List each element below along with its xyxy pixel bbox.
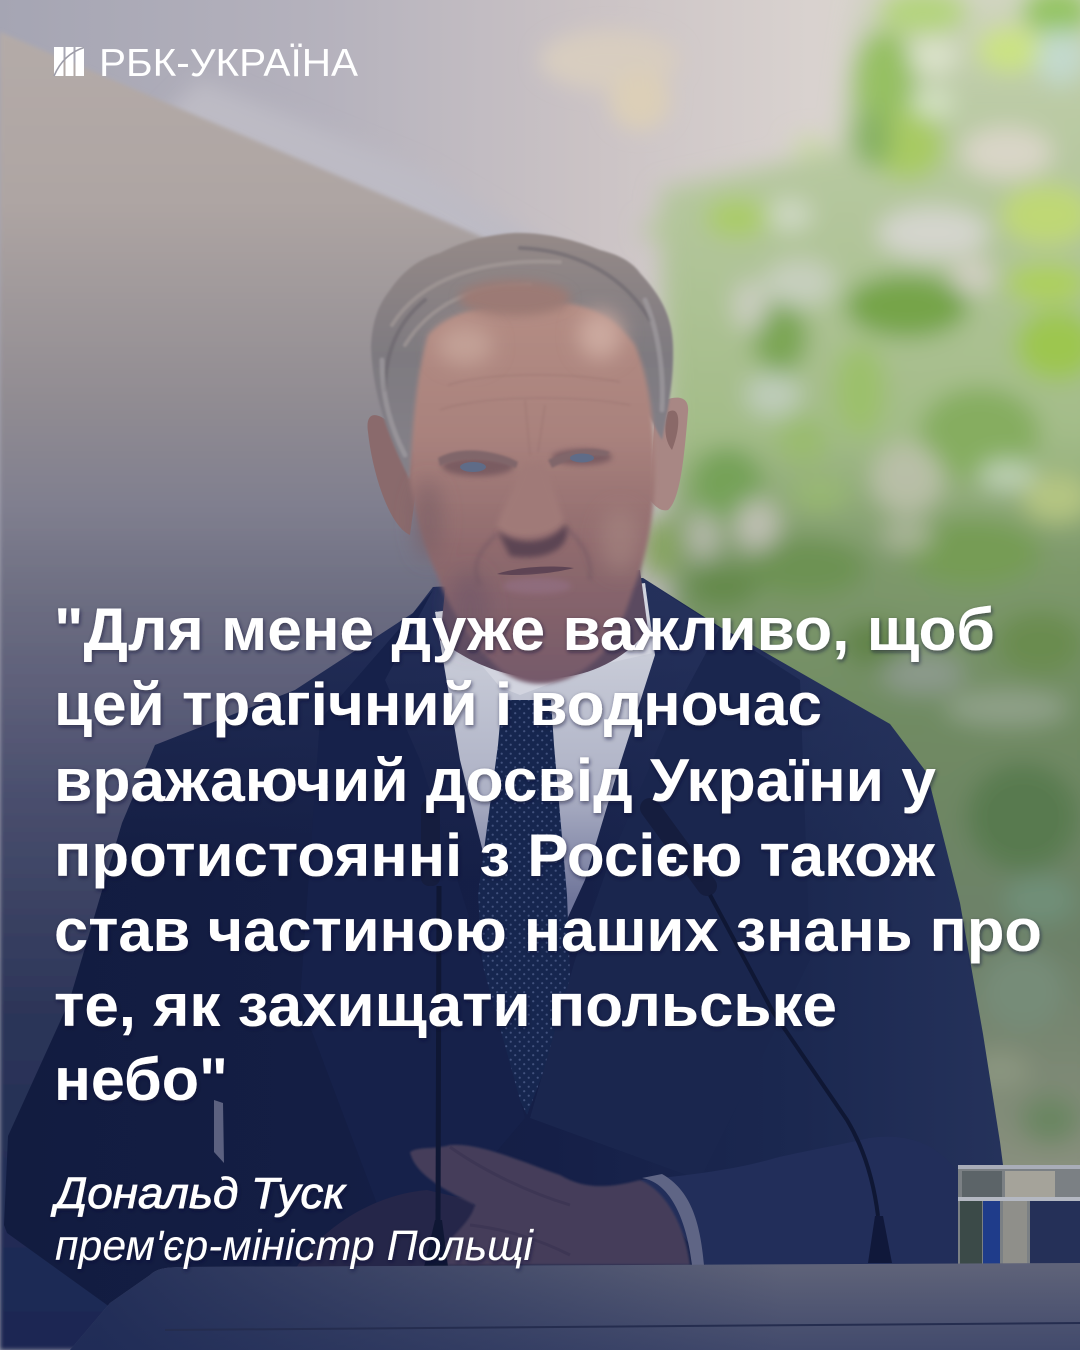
left eye — [460, 462, 486, 472]
right eye — [570, 454, 594, 462]
shirt cuff — [642, 1174, 704, 1265]
right ear — [650, 398, 688, 510]
mouth — [497, 566, 574, 575]
blue stripe — [983, 1201, 1000, 1264]
under-nose shadow — [497, 524, 567, 557]
logo wordmark: РБК-УКРАЇНА — [99, 42, 358, 85]
quote text — [54, 596, 1042, 1113]
quote text: вражаючий досвід України у — [54, 747, 937, 814]
shirt collar — [435, 583, 653, 695]
attribution — [50, 1169, 534, 1270]
quote text: цей трагічний і водночас — [54, 671, 822, 738]
table groove — [165, 1323, 1080, 1330]
portrait of Donald Tusk — [4, 233, 1003, 1350]
quote text: став частиною наших знань про — [54, 897, 1042, 964]
left lapel — [300, 590, 525, 1265]
table left shade — [70, 1263, 1080, 1350]
speaker name: Дональд Туск — [50, 1169, 347, 1218]
wall on the left — [0, 32, 640, 1350]
speaker role: прем'єр-міністр Польщі — [55, 1222, 534, 1270]
neck shadow — [440, 570, 648, 678]
quote text: протистоянні з Росією також — [54, 822, 936, 889]
left ear — [368, 415, 420, 535]
quote text: "Для мене дуже важливо, щоб — [54, 596, 995, 663]
finger shading — [450, 1147, 570, 1255]
nose — [497, 462, 564, 536]
shaded area right of the portrait — [470, 240, 870, 1350]
sleeve white streak — [214, 1100, 224, 1163]
quote text: те, як захищати польське — [54, 972, 837, 1039]
jacket — [4, 578, 1003, 1350]
right brow — [548, 449, 610, 468]
cheek and jaw shading — [414, 480, 640, 650]
foliage on the right — [640, 0, 1080, 1190]
right microphone — [650, 808, 892, 1263]
glass water line — [958, 1197, 1080, 1201]
hair strands — [382, 248, 662, 455]
right hand — [410, 1145, 690, 1265]
left mic stem — [438, 886, 439, 1225]
upper glass tone left — [962, 1171, 1002, 1197]
left mic base — [424, 1220, 448, 1267]
dark reflection — [1030, 1201, 1080, 1264]
ear inner shadow — [665, 411, 678, 450]
glass rim — [958, 1165, 1080, 1169]
forehead highlights — [437, 311, 622, 365]
left mic head — [421, 800, 440, 886]
eye socket shadows — [442, 449, 612, 476]
hair — [371, 233, 673, 480]
hairline tone — [459, 280, 571, 316]
face — [410, 302, 655, 684]
shirt — [435, 583, 655, 1000]
green reflection — [960, 1201, 982, 1264]
right mic head — [650, 808, 707, 886]
logo: RBC-Ukraine — [54, 42, 358, 85]
upper glass light centre — [1005, 1171, 1055, 1197]
lower lip — [503, 578, 571, 594]
right mic base — [868, 1216, 892, 1263]
water glass — [958, 1165, 1080, 1264]
left brow — [438, 450, 518, 468]
jacket shoulder light — [90, 578, 983, 950]
lower right sleeve — [641, 1137, 985, 1265]
logo mark — [54, 47, 84, 76]
dark left hand — [296, 1190, 520, 1268]
quote text: небо" — [54, 1046, 228, 1113]
right mic stem — [710, 895, 878, 1216]
right lapel — [530, 580, 810, 1180]
tie — [478, 700, 571, 1115]
forehead wrinkles — [440, 375, 630, 455]
left microphone — [421, 800, 448, 1267]
nasolabial folds — [476, 528, 590, 585]
lectern table — [70, 1263, 1080, 1350]
light reflection — [1003, 1201, 1027, 1264]
soft light band and warm spots at the top — [160, 30, 680, 320]
